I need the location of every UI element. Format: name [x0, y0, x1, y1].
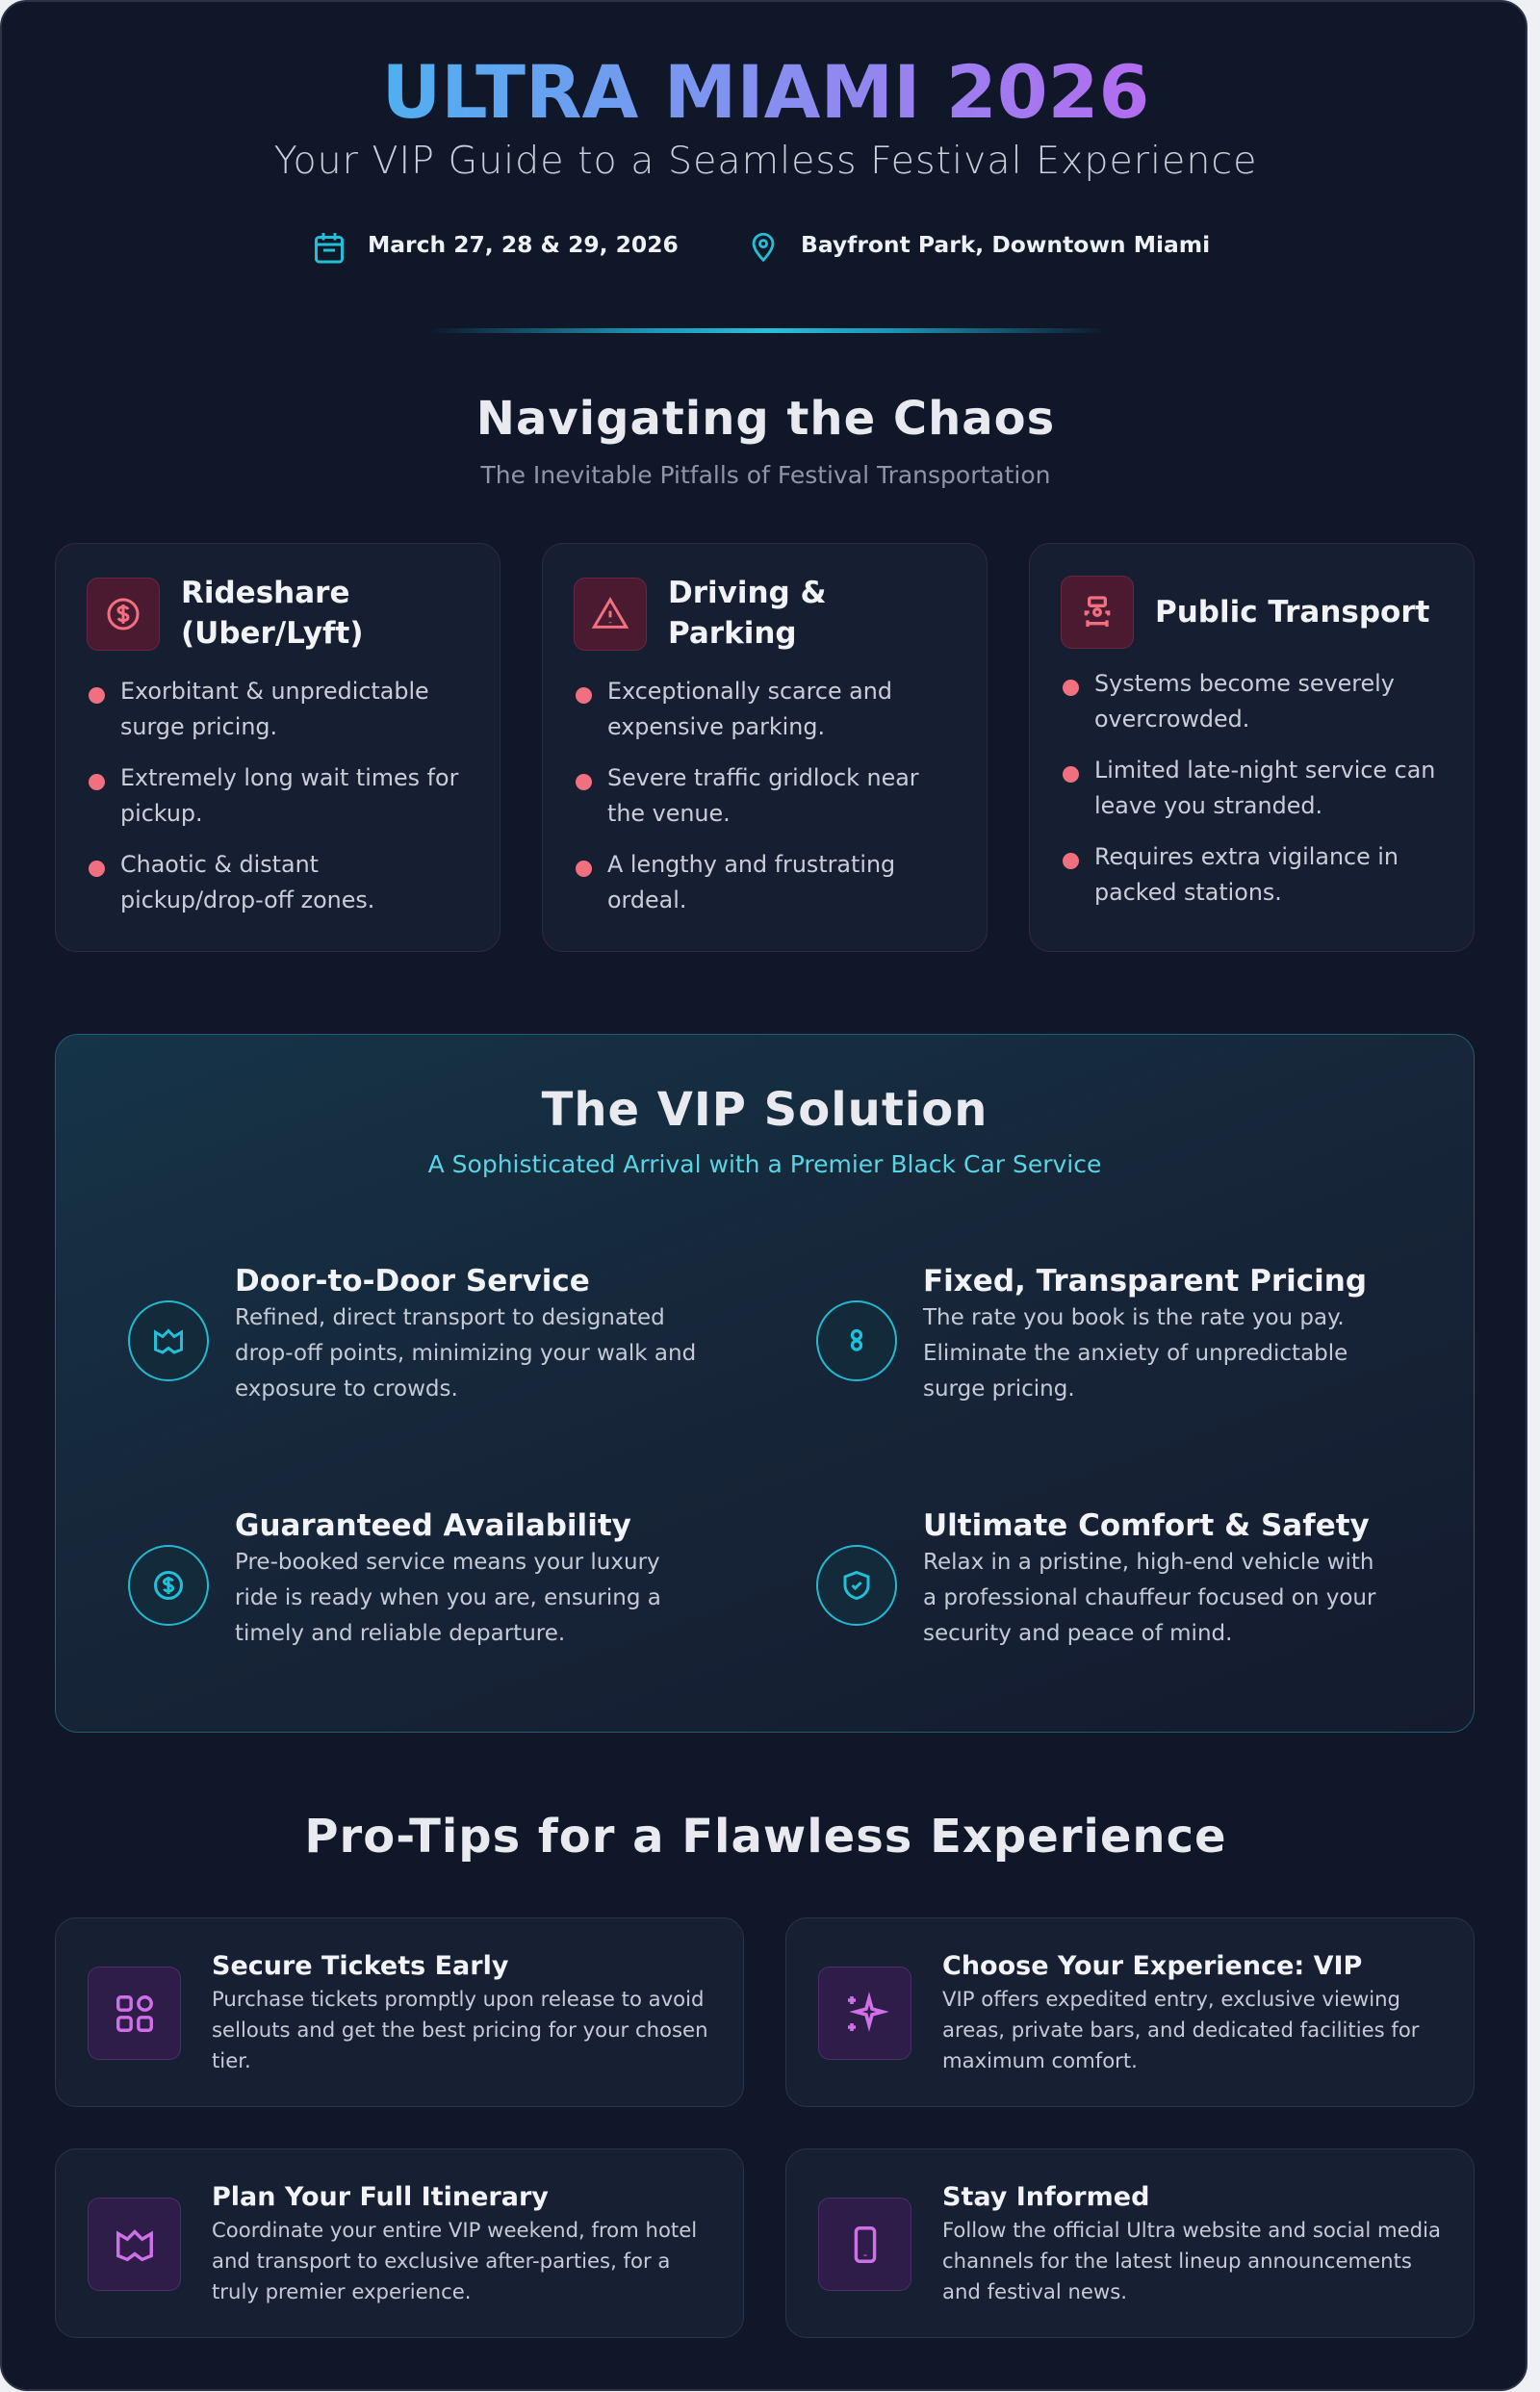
- feature: door-to-door: exposure to crowds.: [235, 1376, 458, 1402]
- bullet list: A lengthy and frustrating ordeal.: [607, 851, 895, 913]
- bullet list: Limited late-night service can leave you stranded.: [1094, 757, 1435, 819]
- bullet list: Severe traffic gridlock near the venue.: [607, 764, 919, 827]
- feature: comfort & safety: security and peace of mind.: [923, 1621, 1232, 1646]
- heading: vip solution: The VIP Solution: [542, 1083, 988, 1137]
- bullet list: Exorbitant & unpredictable surge pricing.: [120, 678, 429, 740]
- panel: public transport: [1029, 543, 1475, 952]
- tip: stay informed: [785, 2148, 1475, 2338]
- icon: train: [1061, 576, 1134, 649]
- panel: rideshare: [55, 543, 500, 952]
- tip: choose vip: VIP offers expedited entry, exclusive viewing: [942, 1987, 1400, 2011]
- heading: pro-tips: Pro-Tips for a Flawless Experience: [304, 1810, 1227, 1864]
- bullet list: Extremely long wait times for pickup.: [120, 764, 458, 827]
- icon: grid: [88, 1967, 181, 2060]
- feature: comfort & safety: Ultimate Comfort & Safety: [923, 1508, 1370, 1543]
- tip: stay informed: Stay Informed: [942, 2182, 1149, 2212]
- panel: driving & parking: [542, 543, 988, 952]
- vip subtitle: A Sophisticated Arrival with a Premier Black Car Service: [428, 1150, 1101, 1178]
- icon: dollar: [87, 578, 160, 651]
- icon: warning: [574, 578, 647, 651]
- feature: door-to-door: drop-off points, minimizing your walk and: [235, 1341, 696, 1366]
- card title: Parking: [668, 616, 797, 651]
- tip: plan itinerary: Coordinate your entire VIP weekend, from hotel: [212, 2218, 697, 2242]
- bullet list: Exceptionally scarce and expensive parking.: [607, 678, 892, 740]
- feature: comfort & safety: [816, 1508, 1376, 1646]
- tip: plan itinerary: truly premier experience.: [212, 2279, 472, 2303]
- card title: Public Transport: [1155, 595, 1429, 630]
- bullet list: [576, 678, 919, 913]
- feature: guaranteed availability: [128, 1508, 661, 1646]
- card title: Driving &: [668, 576, 827, 610]
- tip: stay informed: channels for the latest lineup announcements: [942, 2249, 1412, 2273]
- feature: guaranteed availability: timely and reliable departure.: [235, 1621, 565, 1646]
- icon: calendar: [315, 233, 344, 264]
- card title: (Uber/Lyft): [181, 616, 364, 651]
- title: ULTRA MIAMI 2026: [382, 49, 1149, 135]
- location text: Bayfront Park, Downtown Miami: [801, 231, 1210, 258]
- card title: [181, 576, 364, 651]
- tip: stay informed: and festival news.: [942, 2279, 1127, 2303]
- subtitle: Your VIP Guide to a Seamless Festival Experience: [274, 139, 1257, 183]
- subheading: The Inevitable Pitfalls of Festival Transportation: [480, 461, 1051, 489]
- event info row: [315, 231, 1210, 264]
- tip: secure tickets: tier.: [212, 2048, 251, 2072]
- tip: choose vip: Choose Your Experience: VIP: [942, 1951, 1362, 1981]
- bullet list: Chaotic & distant pickup/drop-off zones.: [120, 851, 374, 913]
- icon: map: [88, 2198, 181, 2291]
- icon: location pin: [753, 233, 774, 262]
- feature: fixed pricing: The rate you book is the rate you pay.: [923, 1305, 1345, 1330]
- tip: plan itinerary: [55, 2148, 744, 2338]
- tip: secure tickets: Secure Tickets Early: [212, 1951, 508, 1981]
- bullet list: [1063, 670, 1435, 906]
- feature: door-to-door: Door-to-Door Service: [235, 1264, 590, 1299]
- bullet list: [89, 678, 458, 913]
- feature: comfort & safety: a professional chauffeur focused on your: [923, 1585, 1375, 1610]
- bullet list: Requires extra vigilance in packed stations.: [1094, 843, 1399, 906]
- feature: comfort & safety: Relax in a pristine, high-end vehicle with: [923, 1550, 1373, 1575]
- heading: navigating the chaos: Navigating the Chaos: [476, 392, 1055, 446]
- icon: coin: [128, 1545, 209, 1626]
- feature: guaranteed availability: Pre-booked service means your luxury: [235, 1550, 660, 1575]
- tip: secure tickets: Purchase tickets promptly upon release to avoid: [212, 1987, 704, 2011]
- tip: plan itinerary: and transport to exclusive after-parties, for a: [212, 2249, 670, 2273]
- card title: [668, 576, 827, 651]
- tip: stay informed: Follow the official Ultra website and social media: [942, 2218, 1441, 2242]
- icon: tag: [816, 1300, 897, 1381]
- icon: map: [128, 1300, 209, 1381]
- feature: guaranteed availability: ride is ready when you are, ensuring a: [235, 1585, 661, 1610]
- feature: fixed pricing: [816, 1264, 1367, 1402]
- feature: fixed pricing: Eliminate the anxiety of unpredictable: [923, 1341, 1348, 1366]
- feature: fixed pricing: surge pricing.: [923, 1376, 1075, 1402]
- feature: fixed pricing: Fixed, Transparent Pricing: [923, 1264, 1367, 1299]
- bullet list: Systems become severely overcrowded.: [1094, 670, 1395, 733]
- tip: choose vip: areas, private bars, and dedicated facilities for: [942, 2018, 1420, 2042]
- feature: door-to-door: Refined, direct transport to designated: [235, 1305, 665, 1330]
- feature: door-to-door: [128, 1264, 696, 1402]
- date text: March 27, 28 & 29, 2026: [368, 231, 679, 258]
- tip: secure tickets: sellouts and get the best pricing for your chosen: [212, 2018, 708, 2042]
- tip: secure tickets: [55, 1917, 744, 2107]
- tip: choose vip: [785, 1917, 1475, 2107]
- icon: phone: [818, 2198, 911, 2291]
- icon: shield: [816, 1545, 897, 1626]
- tip: choose vip: maximum comfort.: [942, 2048, 1138, 2072]
- tip: plan itinerary: Plan Your Full Itinerary: [212, 2182, 549, 2212]
- feature: guaranteed availability: Guaranteed Availability: [235, 1508, 631, 1543]
- panel: vip solution: [55, 1034, 1475, 1733]
- icon: sparkle: [818, 1967, 911, 2060]
- card title: Rideshare: [181, 576, 349, 610]
